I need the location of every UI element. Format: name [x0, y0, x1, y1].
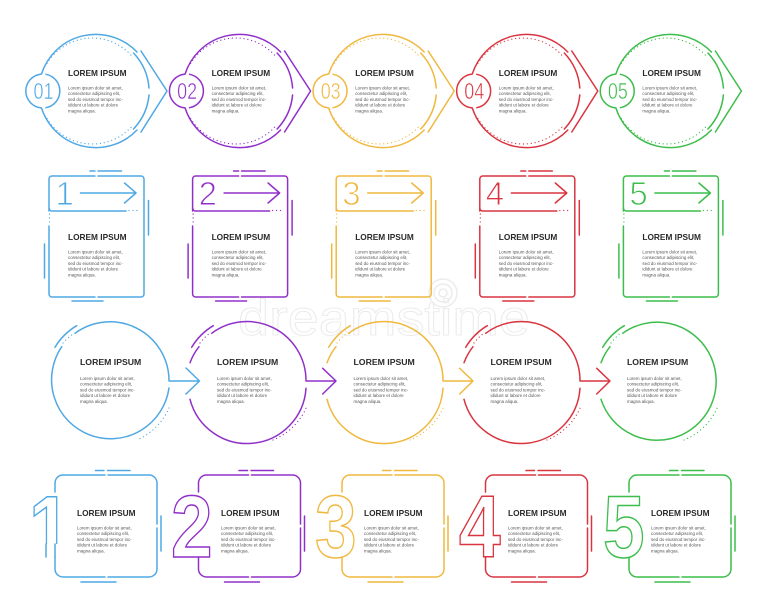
square step 3: ididunt ut labore et dolore: [364, 543, 415, 548]
card 5: [619, 171, 723, 301]
card 1: sed do eiusmod tempor inc-: [68, 261, 123, 266]
card 4: sed do eiusmod tempor inc-: [499, 261, 554, 266]
step 03: 03: [321, 78, 341, 104]
card 5: ididunt ut labore et dolore: [642, 267, 693, 272]
card 3: LOREM IPSUM: [355, 232, 414, 242]
circle step 2: magna aliqua.: [217, 399, 245, 404]
step 02: sed do eiusmod tempor inc-: [212, 97, 267, 102]
square step 2: [171, 470, 304, 582]
square step 1: Lorem ipsum dolor sit amet,: [77, 526, 132, 530]
card 3: Lorem ipsum dolor sit amet,: [355, 250, 410, 254]
card 1: consectetur adipiscing elit,: [68, 255, 120, 260]
square step 2: 2: [171, 478, 213, 576]
circle step 1: ididunt ut labore et dolore: [80, 393, 131, 398]
square step 4: sed do eiusmod tempor inc-: [508, 537, 563, 542]
circle step 3: ididunt ut labore et dolore: [354, 393, 404, 398]
square step 4: magna aliqua.: [508, 548, 536, 553]
step 03: LOREM IPSUM: [355, 68, 414, 78]
card 2: [188, 171, 292, 301]
square step 4: ididunt ut labore et dolore: [508, 543, 559, 548]
circle step 4: [464, 322, 610, 444]
step 02: 02: [177, 78, 197, 104]
circle step 2: Lorem ipsum dolor sit amet,: [217, 376, 272, 381]
card 5: LOREM IPSUM: [642, 232, 701, 242]
card 4: magna aliqua.: [499, 272, 527, 277]
circle step 4: Lorem ipsum dolor sit amet,: [490, 376, 545, 381]
circle step 2: sed do eiusmod tempor inc-: [217, 387, 272, 392]
step 04: ididunt ut labore et dolore: [499, 103, 549, 108]
step 01: ididunt ut labore et dolore: [68, 103, 119, 108]
card 2: sed do eiusmod tempor inc-: [212, 261, 267, 266]
square step 3: 3: [315, 478, 357, 576]
circle step 2: [190, 322, 336, 444]
step 01: LOREM IPSUM: [68, 68, 127, 78]
step 04: sed do eiusmod tempor inc-: [499, 97, 554, 102]
step 05: 05: [608, 78, 628, 104]
step 03: [313, 34, 454, 148]
step 04: [457, 34, 598, 148]
card 3: magna aliqua.: [355, 272, 383, 277]
card 2: consectetur adipiscing elit,: [212, 255, 264, 260]
square step 5: [603, 470, 735, 582]
step 03: Lorem ipsum dolor sit amet,: [355, 86, 410, 90]
row 2: rectangular cards with arrow headers: [44, 171, 723, 301]
step 01: [26, 34, 167, 148]
square step 1: [29, 470, 161, 582]
square step 1: consectetur adipiscing elit,: [77, 531, 129, 536]
step 04: magna aliqua.: [499, 108, 527, 113]
circle step 5: [601, 322, 717, 440]
square step 5: consectetur adipiscing elit,: [651, 531, 703, 536]
card 4: [475, 171, 579, 301]
circle step 3: [327, 322, 473, 444]
card 1: 1: [56, 175, 74, 212]
card 1: Lorem ipsum dolor sit amet,: [68, 250, 123, 254]
card 5: sed do eiusmod tempor inc-: [642, 261, 698, 266]
square step 3: magna aliqua.: [364, 548, 392, 553]
card 1: [44, 171, 148, 301]
circle step 2: consectetur adipiscing elit,: [217, 382, 269, 387]
step 01: consectetur adipiscing elit,: [68, 91, 120, 96]
step 01: 01: [34, 78, 54, 104]
step 02: LOREM IPSUM: [212, 68, 270, 78]
square step 1: sed do eiusmod tempor inc-: [77, 537, 132, 542]
square step 2: ididunt ut labore et dolore: [221, 543, 272, 548]
card 5: 5: [629, 175, 648, 212]
square step 4: [459, 470, 592, 582]
card 3: 3: [342, 175, 361, 212]
card 4: LOREM IPSUM: [499, 232, 557, 242]
circle step 3: Lorem ipsum dolor sit amet,: [354, 376, 408, 381]
card 3: ididunt ut labore et dolore: [355, 267, 406, 272]
circle step 2: LOREM IPSUM: [217, 357, 278, 367]
step 05: magna aliqua.: [642, 108, 670, 113]
card 2: LOREM IPSUM: [212, 232, 270, 242]
step 04: Lorem ipsum dolor sit amet,: [499, 86, 554, 90]
card 4: 4: [486, 175, 504, 212]
circle step 3: LOREM IPSUM: [354, 357, 415, 367]
circle step 4: LOREM IPSUM: [490, 357, 552, 367]
row 3: large circles linked by arrows: [52, 322, 717, 444]
square step 1: LOREM IPSUM: [77, 508, 136, 518]
square step 4: LOREM IPSUM: [508, 508, 567, 518]
circle step 5: consectetur adipiscing elit,: [627, 382, 679, 387]
circle step 4: magna aliqua.: [490, 399, 518, 404]
circle step 3: magna aliqua.: [354, 399, 381, 404]
card 3: sed do eiusmod tempor inc-: [355, 261, 410, 266]
circle step 1: consectetur adipiscing elit,: [80, 382, 132, 387]
card 5: consectetur adipiscing elit,: [642, 255, 694, 260]
square step 5: sed do eiusmod tempor inc-: [651, 537, 706, 542]
square step 5: LOREM IPSUM: [651, 508, 710, 518]
card 3: consectetur adipiscing elit,: [355, 255, 407, 260]
card 5: magna aliqua.: [642, 272, 670, 277]
circle step 4: sed do eiusmod tempor inc-: [490, 387, 546, 392]
step 05: Lorem ipsum dolor sit amet,: [642, 86, 697, 90]
square step 2: consectetur adipiscing elit,: [221, 531, 273, 536]
card 2: 2: [199, 175, 217, 212]
square step 3: [315, 470, 448, 582]
circle step 1: LOREM IPSUM: [80, 357, 141, 367]
circle step 1: sed do eiusmod tempor inc-: [80, 387, 135, 392]
card 1: LOREM IPSUM: [68, 232, 127, 242]
card 2: Lorem ipsum dolor sit amet,: [212, 250, 266, 254]
card 2: ididunt ut labore et dolore: [212, 267, 262, 272]
circle step 5: ididunt ut labore et dolore: [627, 393, 678, 398]
square step 3: consectetur adipiscing elit,: [364, 531, 416, 536]
card 1: ididunt ut labore et dolore: [68, 267, 119, 272]
square step 1: 1: [29, 479, 71, 577]
circle step 5: Lorem ipsum dolor sit amet,: [627, 376, 682, 381]
step 03: ididunt ut labore et dolore: [355, 103, 406, 108]
step 01: magna aliqua.: [68, 108, 96, 113]
circle step 5: sed do eiusmod tempor inc-: [627, 387, 682, 392]
square step 3: LOREM IPSUM: [364, 508, 423, 518]
step 05: LOREM IPSUM: [642, 68, 701, 78]
circle step 4: consectetur adipiscing elit,: [490, 382, 543, 387]
step 02: ididunt ut labore et dolore: [212, 103, 262, 108]
step 04: LOREM IPSUM: [499, 68, 557, 78]
step 04: consectetur adipiscing elit,: [499, 91, 551, 96]
circle step 3: sed do eiusmod tempor inc-: [354, 387, 409, 392]
step 05: ididunt ut labore et dolore: [642, 103, 693, 108]
watermark: dreamstime: [238, 290, 530, 346]
step 05: sed do eiusmod tempor inc-: [642, 97, 698, 102]
step 05: consectetur adipiscing elit,: [642, 91, 694, 96]
circle step 3: consectetur adipiscing elit,: [354, 382, 406, 387]
card 4: Lorem ipsum dolor sit amet,: [499, 250, 554, 254]
step 02: magna aliqua.: [212, 108, 239, 113]
row 1: circular steps with chevrons: [26, 34, 741, 148]
square step 2: LOREM IPSUM: [221, 508, 280, 518]
card 3: [332, 171, 436, 301]
step 01: sed do eiusmod tempor inc-: [68, 97, 123, 102]
circle step 4: ididunt ut labore et dolore: [490, 393, 541, 398]
circle step 5: magna aliqua.: [627, 399, 655, 404]
step 04: 04: [464, 78, 484, 104]
square step 2: Lorem ipsum dolor sit amet,: [221, 526, 276, 530]
step 02: Lorem ipsum dolor sit amet,: [212, 86, 266, 90]
card 4: ididunt ut labore et dolore: [499, 267, 549, 272]
square step 4: consectetur adipiscing elit,: [508, 531, 560, 536]
square step 2: sed do eiusmod tempor inc-: [221, 537, 276, 542]
square step 4: 4: [459, 478, 501, 576]
card 2: magna aliqua.: [212, 272, 239, 277]
card 4: consectetur adipiscing elit,: [499, 255, 551, 260]
step 01: Lorem ipsum dolor sit amet,: [68, 86, 123, 90]
step 03: sed do eiusmod tempor inc-: [355, 97, 410, 102]
circle step 2: ididunt ut labore et dolore: [217, 393, 268, 398]
step 05: [600, 34, 741, 148]
square step 5: Lorem ipsum dolor sit amet,: [651, 526, 706, 530]
square step 5: ididunt ut labore et dolore: [651, 543, 702, 548]
step 02: [169, 34, 311, 148]
square step 1: magna aliqua.: [77, 548, 105, 553]
square step 2: magna aliqua.: [221, 548, 249, 553]
circle step 1: magna aliqua.: [80, 399, 108, 404]
step 02: consectetur adipiscing elit,: [212, 91, 264, 96]
step 03: magna aliqua.: [355, 108, 383, 113]
card 5: Lorem ipsum dolor sit amet,: [642, 250, 697, 254]
circle step 5: LOREM IPSUM: [627, 357, 688, 367]
square step 3: Lorem ipsum dolor sit amet,: [364, 526, 419, 530]
square step 3: sed do eiusmod tempor inc-: [364, 537, 419, 542]
square step 4: Lorem ipsum dolor sit amet,: [508, 526, 563, 530]
square step 5: 5: [603, 478, 645, 576]
card 1: magna aliqua.: [68, 272, 96, 277]
step 03: consectetur adipiscing elit,: [355, 91, 407, 96]
square step 1: ididunt ut labore et dolore: [77, 543, 128, 548]
circle step 1: [52, 322, 199, 440]
square step 5: magna aliqua.: [651, 548, 679, 553]
row 4: rounded squares with outlined numerals: [29, 470, 735, 582]
circle step 1: Lorem ipsum dolor sit amet,: [80, 376, 135, 381]
